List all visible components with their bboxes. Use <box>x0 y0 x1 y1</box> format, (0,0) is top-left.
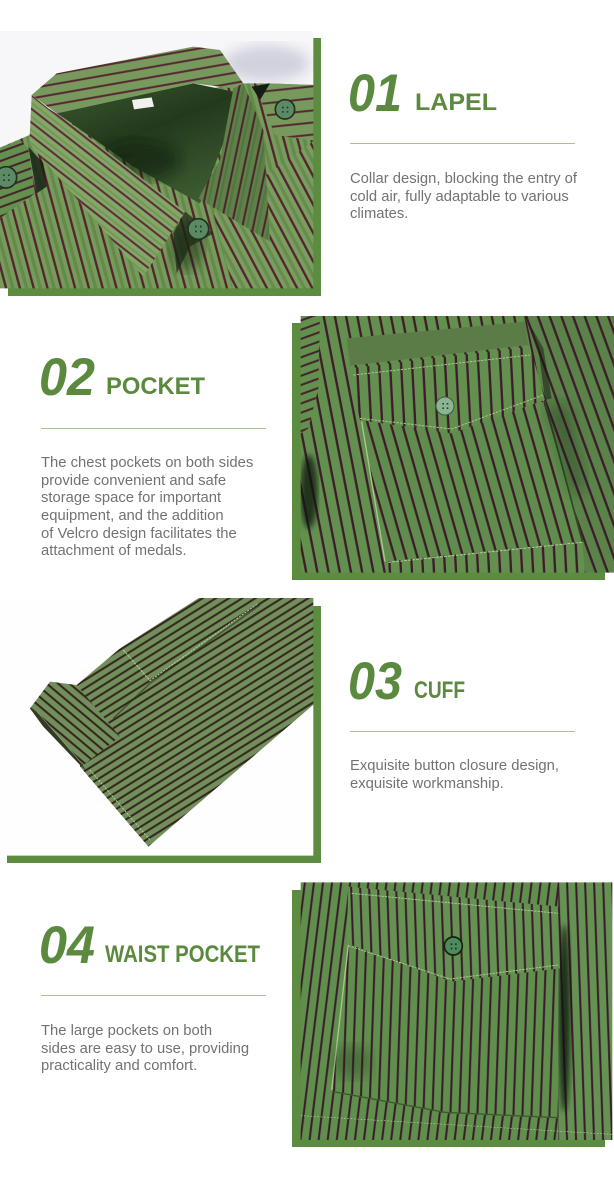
heading: LAPEL <box>415 89 497 116</box>
description: of Velcro design facilitates the <box>41 526 237 542</box>
description: storage space for important <box>41 490 221 506</box>
description: The chest pockets on both sides <box>41 455 253 471</box>
description: provide convenient and safe <box>41 473 226 489</box>
photo: sleeve cuff <box>0 595 315 857</box>
photo: waist pocket <box>298 880 614 1142</box>
description: cold air, fully adaptable to various <box>350 189 569 205</box>
photo: chest pocket <box>298 313 614 575</box>
section 03: cuff <box>0 595 575 863</box>
heading: WAIST POCKET <box>105 941 260 968</box>
green frame offset behind waist pocket photo <box>292 890 605 1147</box>
photo: shirt collar <box>0 31 315 290</box>
green frame offset behind lapel photo <box>8 38 321 296</box>
section 01: lapel <box>0 31 578 296</box>
heading: CUFF <box>414 677 465 704</box>
green frame offset behind cuff photo <box>7 606 321 863</box>
section number: 02 <box>39 348 95 407</box>
section 02: pocket <box>39 313 614 580</box>
description: practicality and comfort. <box>41 1058 197 1074</box>
description: climates. <box>350 206 408 222</box>
description: Exquisite button closure design, <box>350 758 559 774</box>
button <box>444 937 462 955</box>
description: attachment of medals. <box>41 543 187 559</box>
button <box>436 397 454 415</box>
velcro strip <box>347 322 528 366</box>
section 04: waist pocket <box>39 880 614 1147</box>
description: equipment, and the addition <box>41 508 224 524</box>
buttons <box>188 219 209 239</box>
description: The large pockets on both <box>41 1023 212 1039</box>
section number: 03 <box>348 652 402 711</box>
description: sides are easy to use, providing <box>41 1041 249 1057</box>
description: exquisite workmanship. <box>350 776 504 792</box>
section number: 04 <box>39 916 95 975</box>
description: Collar design, blocking the entry of <box>350 171 578 187</box>
heading: POCKET <box>106 373 205 400</box>
section number: 01 <box>348 64 402 123</box>
green frame offset behind pocket photo <box>292 323 605 580</box>
